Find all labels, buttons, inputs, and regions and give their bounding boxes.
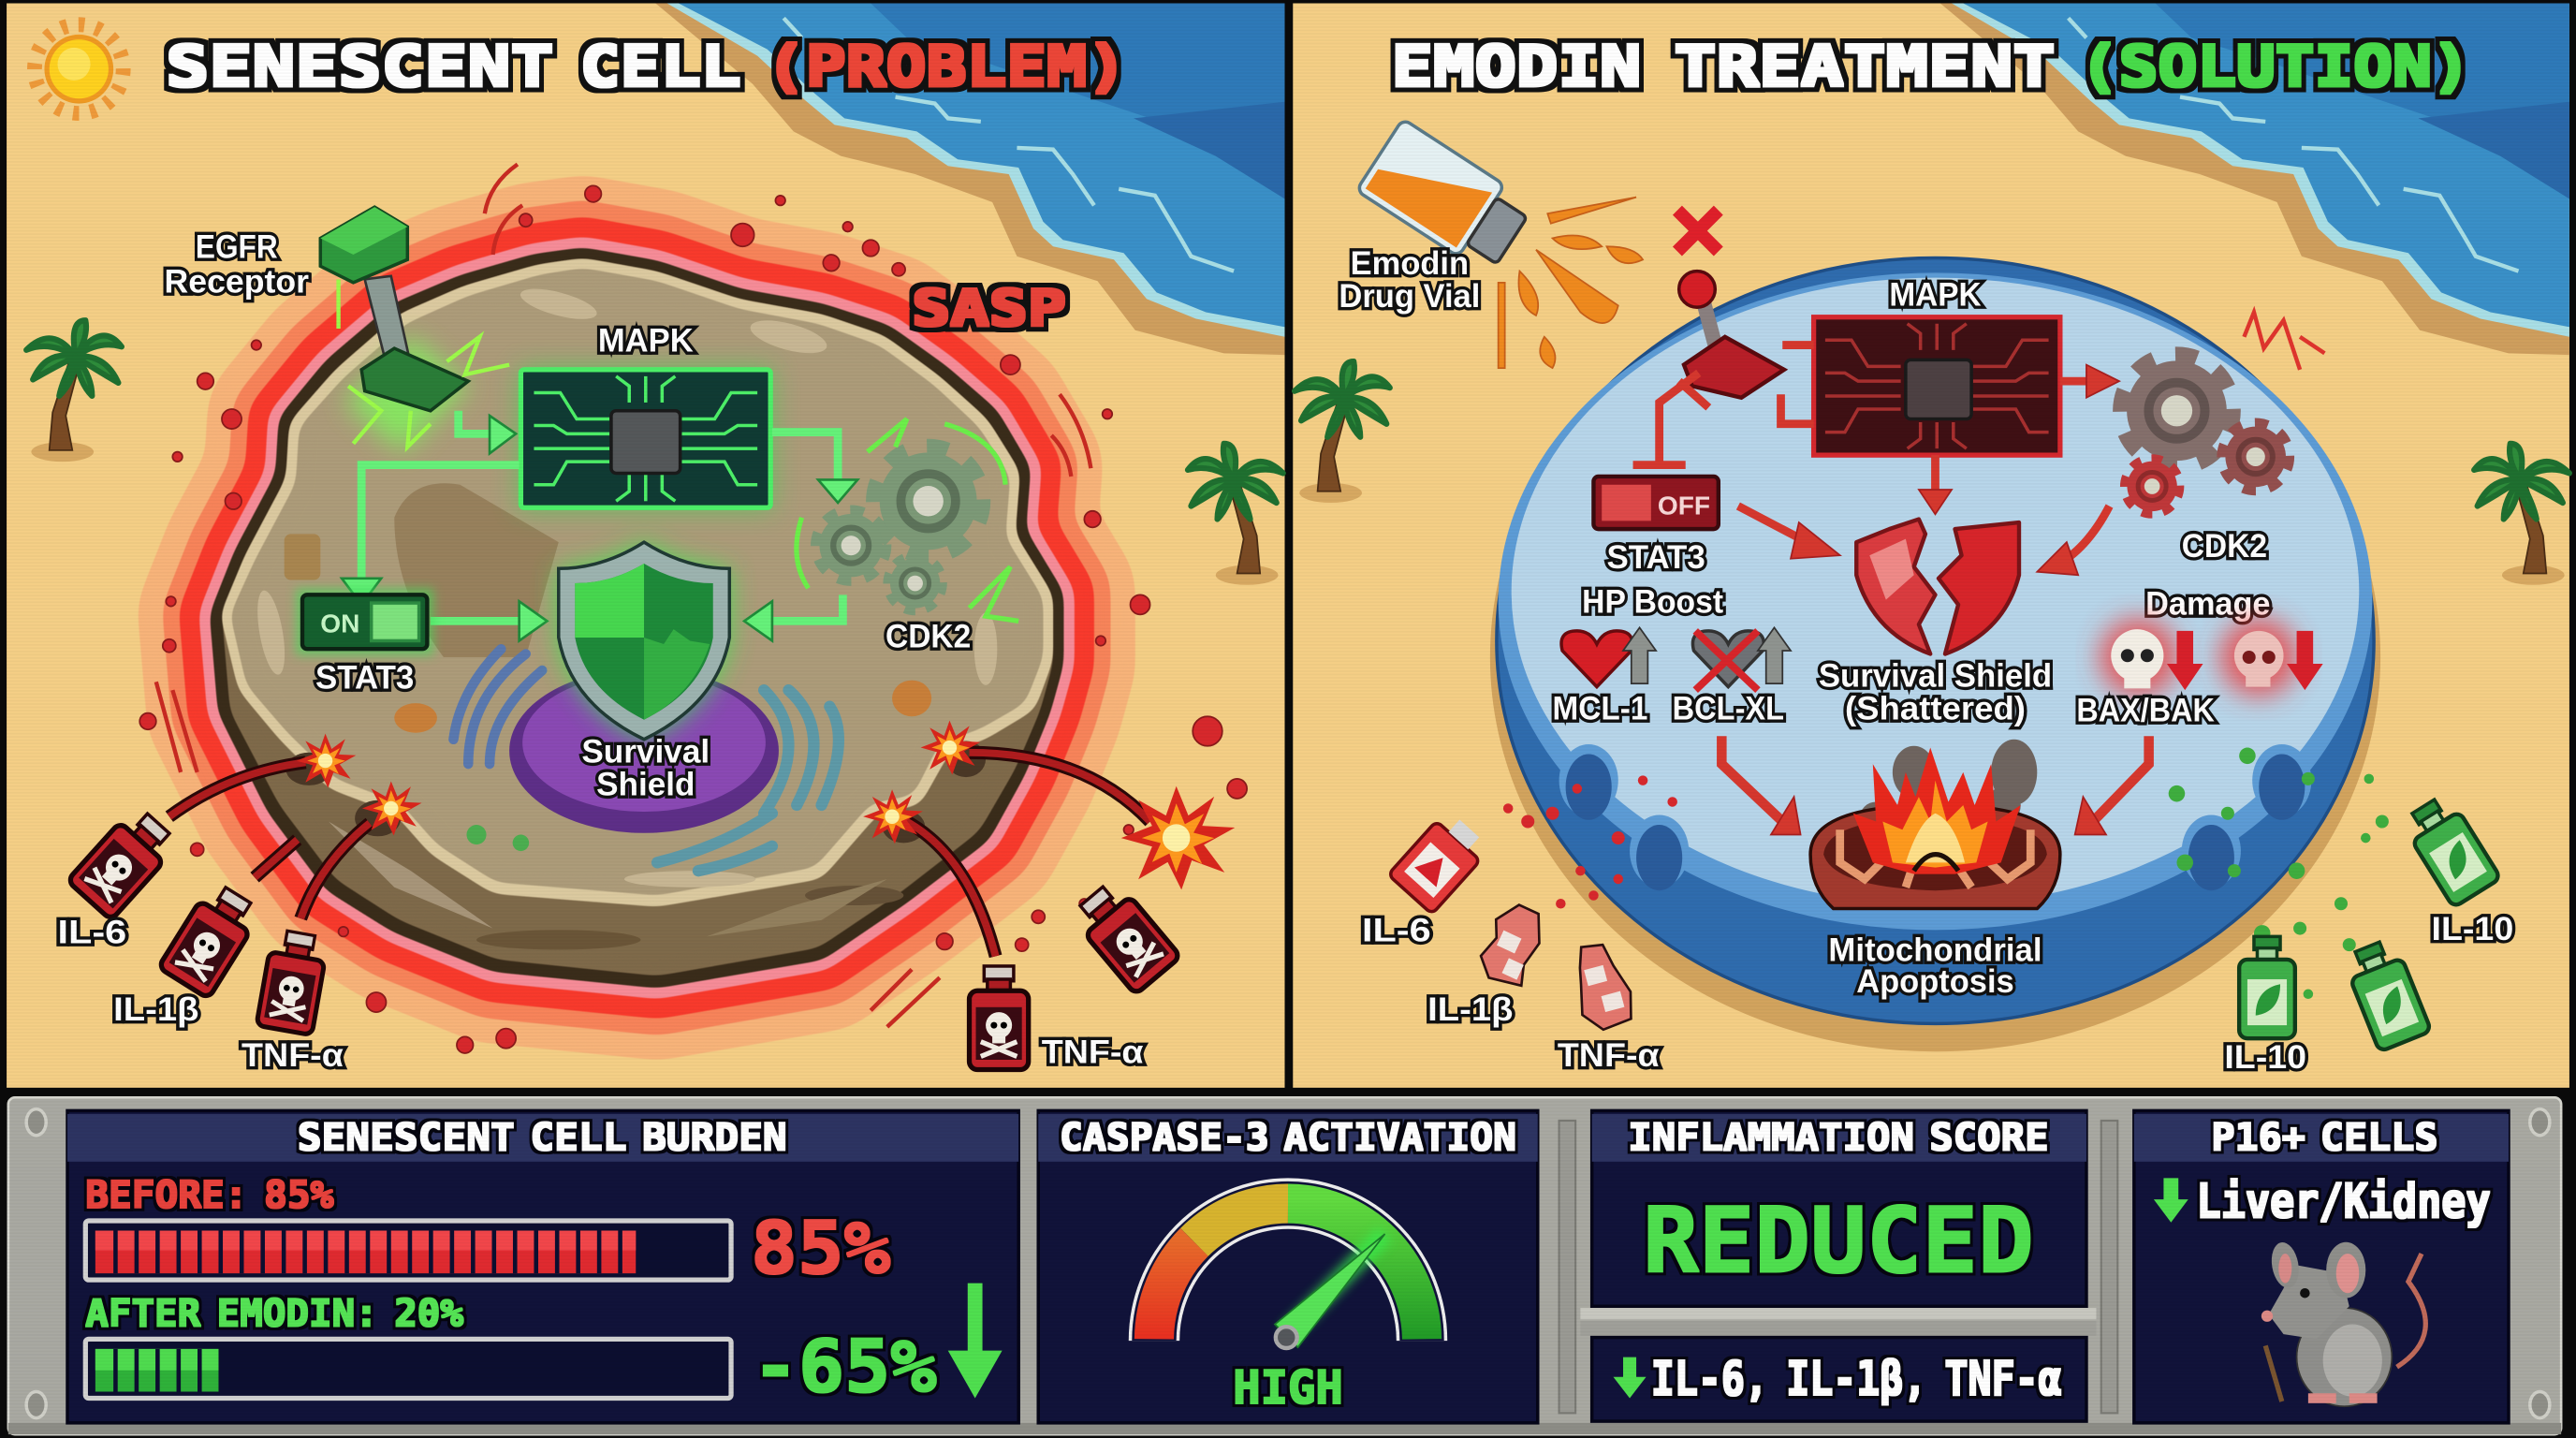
mitochondria and vesicles: [285, 534, 931, 851]
cytokine list: IL-6, IL-1β, TNF-α: [1651, 1352, 2062, 1407]
title: senescent cell problem: (PROBLEM): [766, 35, 1127, 99]
panel: cytokines reduced: [1592, 1338, 2086, 1421]
ruptured bottle IL-1 beta: [1472, 899, 1552, 991]
palm tree left: [26, 320, 122, 462]
header bar: [67, 1114, 1018, 1162]
right panel: emodin treatment solution: [1293, 4, 2569, 1088]
icon: sun: [35, 24, 124, 113]
poison bottle IL-1 beta: [158, 880, 263, 999]
label: EGFR Receptor: Receptor: [165, 263, 309, 300]
metal dashboard frame: [8, 1097, 2561, 1434]
label: emodin drug vial: Emodin: [1351, 245, 1469, 282]
heading: SENESCENT CELL BURDEN: [298, 1116, 787, 1160]
gauge pivot: [1276, 1327, 1297, 1348]
after bar segments: [95, 1349, 218, 1392]
label: shattered shield: Survival Shield: [1819, 658, 2052, 695]
palm tree right: [2474, 444, 2569, 585]
header bar: [1592, 1114, 2086, 1162]
label: STAT3: STAT3: [1606, 539, 1705, 576]
CDK2 gears: [797, 419, 1018, 621]
label: EGFR Receptor: EGFR: [196, 229, 278, 266]
label: before: BEFORE: 85%: [85, 1173, 334, 1217]
label: CDK2: CDK2: [886, 618, 971, 654]
label: after emodin: AFTER EMODIN: 20%: [85, 1291, 464, 1335]
survival shield: [559, 542, 729, 740]
label: SASP: SASP: [912, 280, 1066, 337]
label: EGFR Receptor: [165, 229, 309, 300]
title: emodin treatment solution: EMODIN: [1392, 35, 1641, 99]
label: survival shield: Survival: [581, 733, 710, 770]
label: emodin drug vial: [1339, 245, 1480, 315]
cytokine labels left: TNF-α: [242, 1037, 344, 1074]
panel: senescent cell burden: [67, 1110, 1018, 1423]
EGFR lever: [320, 207, 509, 452]
icon: old mouse with cane: [2261, 1240, 2425, 1406]
title: emodin treatment solution: (SOLUTION): [2080, 35, 2471, 99]
label: Mitochondrial Apoptosis: Mitochondrial: [1828, 932, 2042, 969]
gauge needle glow: [1286, 1234, 1385, 1334]
poison bottle far right: [1069, 877, 1180, 994]
panel: caspase-3 activation: [1038, 1110, 1538, 1423]
gauge: [1154, 1204, 1422, 1348]
MAPK chip: [520, 368, 772, 509]
green bottle middle: [2341, 936, 2431, 1052]
green signal arrows: [342, 411, 857, 640]
shattered shield: [1856, 520, 2019, 654]
motion strokes: [156, 165, 1090, 1027]
panel: inflammation score: [1592, 1110, 2086, 1306]
gauge needle: [1275, 1234, 1385, 1347]
damaged CDK2 gears: [2124, 312, 2324, 513]
cell inner shading: [394, 483, 559, 657]
red lever: [1679, 271, 1784, 398]
header bar: [2134, 1114, 2509, 1162]
ocean left: [655, 4, 1284, 355]
STAT3 ON switch: [296, 588, 433, 655]
title: senescent cell problem: SENESCENT: [166, 35, 554, 99]
surface highlights: [253, 283, 997, 888]
green bottle upper right: [2399, 792, 2501, 908]
heading: P16+ CELLS: [2211, 1116, 2438, 1160]
panel: p16+ cells: [2134, 1110, 2509, 1423]
sand background left: [7, 4, 1284, 1088]
icon: BCL-XL crossed heart with up arrow: [1692, 627, 1791, 690]
cytokine labels right panel: IL-10: [2224, 1039, 2306, 1076]
cell red glow: [213, 252, 1060, 984]
cytokine labels right panel: IL-6: [1362, 913, 1431, 949]
icon: down arrow: [1613, 1357, 1647, 1399]
label: MAPK: MAPK: [1889, 276, 1982, 313]
palm tree left: [1295, 361, 1390, 503]
title: emodin treatment solution: [1392, 35, 2471, 99]
STAT3 ON switch: ON: [320, 609, 359, 638]
before bar segments: [95, 1231, 636, 1273]
before bar track: [85, 1221, 731, 1280]
icon: MCL-1 heart with up arrow: [1561, 627, 1656, 687]
cytokine labels left: TNF-α: [1042, 1034, 1144, 1071]
SASP particles: [139, 185, 1247, 1053]
title: senescent cell problem: [166, 35, 1127, 99]
MAPK chip inhibited: [1814, 317, 2060, 455]
burning mitochondrion: [1810, 740, 2060, 909]
treated cell: [1490, 258, 2380, 1051]
title: senescent cell problem: CELL: [580, 35, 741, 99]
header bar: [1038, 1114, 1538, 1162]
red debris: [1503, 775, 1677, 909]
value: minus 65%: -65%: [753, 1326, 936, 1410]
label: HP Boost: HP Boost: [1582, 584, 1723, 621]
emodin drug vial: [1356, 119, 1535, 276]
left panel: senescent cell problem: [7, 4, 1284, 1088]
cytokine labels right panel: [1362, 911, 2513, 1076]
cytokine labels left: IL-6: [57, 914, 126, 950]
organelle: nucleus: [509, 668, 779, 833]
cytokine labels right panel: IL-10: [2431, 911, 2513, 947]
organelle: golgi left: [453, 649, 542, 764]
icon: green down arrow: [948, 1284, 1003, 1399]
label: CDK2: CDK2: [2182, 528, 2267, 565]
label: emodin drug vial: Drug Vial: [1339, 278, 1480, 315]
sand background right: [1293, 4, 2569, 1088]
poison bottle TNF-alpha: [256, 929, 329, 1035]
label: MAPK: MAPK: [598, 323, 694, 360]
green debris: [2169, 748, 2389, 999]
STAT3 off switch: OFF: [1658, 491, 1710, 520]
label: Mitochondrial Apoptosis: Apoptosis: [1856, 963, 2014, 1000]
icon: down arrow: [2154, 1178, 2188, 1223]
cytokine labels left: [57, 914, 1144, 1074]
cytokine labels right panel: IL-1β: [1427, 991, 1513, 1028]
poison trails: [169, 753, 1150, 956]
after bar track: [85, 1339, 731, 1399]
cell rim: [213, 252, 1060, 984]
inhibit X mark: [1677, 211, 1719, 252]
palm tree right: [1188, 444, 1283, 585]
label: BAX/BAK: BAX/BAK: [2076, 692, 2215, 728]
label: shattered shield: [1819, 658, 2052, 727]
ocean right: [1940, 4, 2569, 355]
burnt membrane holes: [285, 741, 986, 843]
organ label: Liver/Kidney: [2197, 1174, 2491, 1229]
ruptured bottle IL-6: [1388, 809, 1491, 914]
label: Damage: Damage: [2145, 585, 2271, 622]
cytokine labels right panel: TNF-α: [1558, 1037, 1660, 1074]
label: survival shield: Shield: [596, 766, 695, 802]
title: emodin treatment solution: TREATMENT: [1674, 35, 2056, 99]
cell body: [213, 252, 1060, 984]
heading: INFLAMMATION SCORE: [1628, 1116, 2049, 1160]
organelle: ER right: [657, 690, 839, 871]
gauge value: HIGH: [1233, 1360, 1343, 1415]
poison bottle right: [970, 966, 1029, 1070]
emodin drops: [1499, 198, 1643, 368]
cytokine labels left: IL-1β: [113, 991, 198, 1028]
poison bottle IL-6: [67, 804, 181, 920]
heading: CASPASE-3 ACTIVATION: [1060, 1116, 1516, 1160]
label: shattered shield: (Shattered): [1845, 691, 2026, 727]
value: reduced: REDUCED: [1643, 1187, 2034, 1293]
rim shading: [329, 822, 903, 949]
STAT3 off switch: [1593, 477, 1719, 529]
cell top surface: [230, 268, 1044, 895]
label: survival shield: [581, 733, 710, 802]
labels: MCL-1 and BCL-XL: BCL-XL: [1673, 691, 1784, 727]
label: STAT3: STAT3: [315, 659, 414, 696]
cell membrane notches: [1559, 744, 2311, 890]
label: Mitochondrial Apoptosis: [1828, 932, 2042, 1000]
big explosion: [1121, 786, 1235, 889]
labels: MCL-1 and BCL-XL: [1553, 691, 1784, 727]
explosions on cell edge: [297, 721, 980, 844]
value: 85%: 85%: [751, 1207, 890, 1291]
icon: skull damage arrows: [2100, 618, 2323, 697]
cell top surface edge: [220, 258, 1053, 907]
red inhibition arrows: [1633, 345, 2149, 835]
green bottle IL-10 bottom: [2239, 936, 2295, 1038]
ruptured bottle TNF-alpha: [1565, 938, 1638, 1034]
labels: MCL-1 and BCL-XL: MCL-1: [1553, 691, 1647, 727]
